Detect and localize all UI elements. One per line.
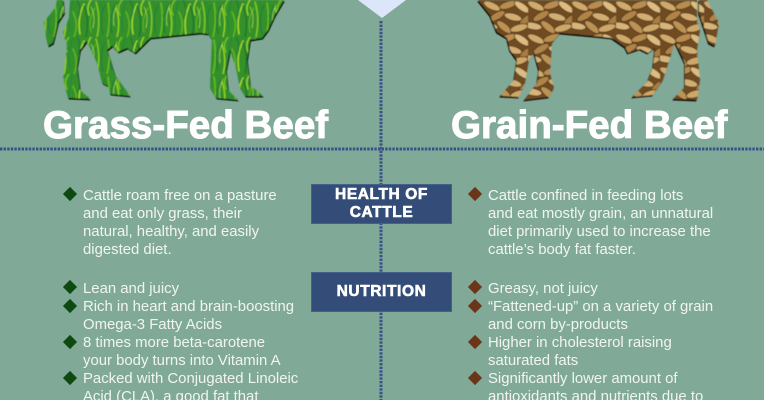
text block: grain nutrition: Greasy, not juicy — [488, 281, 598, 297]
text block: grass health — [83, 188, 277, 258]
bullet: lean — [63, 280, 77, 294]
text block: grain health: Cattle confined in feeding lots — [488, 188, 683, 204]
text block: grass nutrition: Lean and juicy — [83, 281, 179, 297]
text block: grain nutrition: saturated fats — [488, 353, 578, 369]
text block: grain health: diet primarily used to increase the — [488, 224, 711, 240]
text block: grass nutrition: 8 times more beta-carotene — [83, 335, 265, 351]
label: health of cattle: HEALTH OF — [335, 186, 428, 203]
label: nutrition: NUTRITION — [337, 283, 426, 300]
heading: grain-fed: Grain-Fed Beef — [451, 104, 728, 147]
bullet: omega — [63, 299, 77, 313]
bullet: beta-carotene — [63, 335, 77, 349]
text block: grain nutrition: and corn by-products — [488, 317, 628, 333]
text block: grain health: and eat mostly grain, an unnatural — [488, 206, 713, 222]
text block: grass health: Cattle roam free on a pasture — [83, 188, 277, 204]
icon: grass-textured cow — [44, 0, 285, 101]
text block: grain nutrition: Higher in cholesterol raising — [488, 335, 672, 351]
text block: grass nutrition: Rich in heart and brain-boosting — [83, 299, 294, 315]
bullet: greasy — [468, 280, 482, 294]
bullet: cla — [63, 371, 77, 385]
text block: grain nutrition — [488, 281, 713, 400]
text block: grain health — [488, 188, 713, 258]
icon: top centre chevron — [358, 0, 406, 18]
text block: grain nutrition: Significantly lower amount of — [488, 371, 678, 387]
bullet: antioxidants — [468, 371, 482, 385]
label: health of cattle — [311, 184, 452, 224]
bullet: fattened — [468, 299, 482, 313]
text block: grain health: cattle’s body fat faster. — [488, 242, 636, 258]
label: health of cattle: CATTLE — [350, 204, 413, 221]
text block: grass nutrition: Packed with Conjugated Linoleic — [83, 371, 298, 387]
text block: grass nutrition — [83, 281, 298, 400]
bullet: grain health — [468, 187, 482, 201]
text block: grain nutrition: “Fattened-up” on a variety of grain — [488, 299, 713, 315]
text block: grass nutrition: your body turns into Vitamin A — [83, 353, 281, 369]
bullet: cholesterol — [468, 335, 482, 349]
icon: grain-textured cow — [477, 0, 719, 101]
bullet: grass health — [63, 187, 77, 201]
text block: grass health: natural, healthy, and easily — [83, 224, 259, 240]
label: nutrition — [311, 272, 452, 312]
text block: grass health: and eat only grass, their — [83, 206, 242, 222]
heading: grass-fed: Grass-Fed Beef — [43, 104, 328, 147]
text block: grass nutrition: Omega-3 Fatty Acids — [83, 317, 222, 333]
text block: grass health: digested diet. — [83, 242, 172, 258]
